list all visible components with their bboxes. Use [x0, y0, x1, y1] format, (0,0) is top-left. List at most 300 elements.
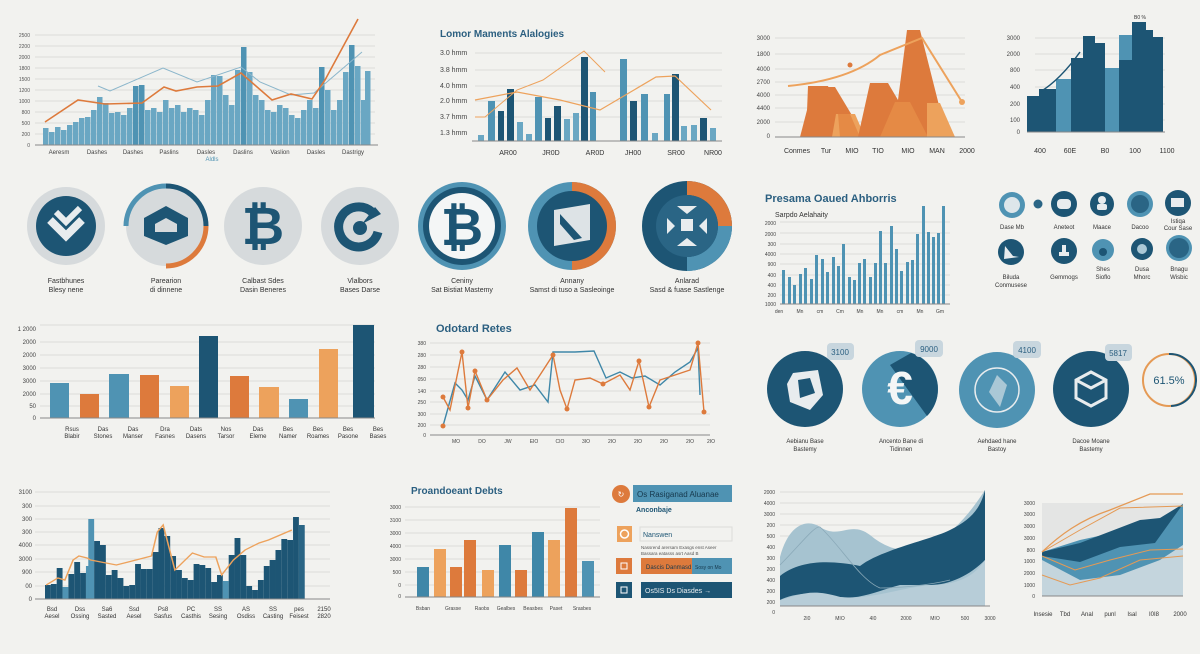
heading: Lomor Maments Alalogies — [440, 29, 565, 40]
item 3 — [616, 582, 632, 598]
panel: Proandoeant debts bar chart: Bsban — [416, 606, 430, 612]
panel: layered area chart: 200 — [767, 523, 775, 529]
panel: small icon grid: Shes — [1096, 267, 1110, 273]
panel: bottom-left bar chart: Ssd — [129, 607, 139, 613]
panel: Proandoeant debts bar chart: 3000 — [390, 505, 401, 511]
panel: bottom-left bar chart: pes — [294, 607, 304, 613]
panel: middle bar chart: Namer — [279, 434, 297, 440]
text block: badge labels: Dacoe Moane — [1072, 439, 1110, 445]
panel: Prestma bar chart: cm — [817, 309, 823, 315]
panel: Odotard rates line chart: DO — [478, 439, 486, 445]
panel: top-left bar chart: 500 — [22, 121, 30, 127]
text block: icon labels: Samst di tuso a Sasleoinge — [530, 287, 615, 294]
panel: middle bar chart: Tarsor — [218, 434, 234, 440]
panel: bottom-left bar chart — [19, 490, 331, 620]
panel: bottom-left bar chart: Sasfus — [154, 614, 172, 620]
panel: bottom-left bar chart: 2150 — [317, 607, 331, 613]
icon: chart dial — [321, 187, 399, 265]
panel: small icon grid: Sioflo — [1095, 275, 1111, 281]
panel: Lomor markets analysis bar chart: 3.7 hmm — [440, 114, 467, 121]
text block: badge labels: Bastemy — [793, 447, 817, 453]
panel: middle bar chart: Roames — [307, 434, 329, 440]
panel: layered area chart: 3000 — [984, 616, 996, 622]
panel: top-left bar chart: Dashes — [123, 150, 143, 156]
panel: Proandoeant debts bar chart: Srasbes — [573, 606, 592, 612]
panel: Prestma bar chart: 2000 — [765, 232, 776, 238]
panel: orange area chart: MIO — [901, 148, 915, 155]
panel: layered area chart: 2I0 — [804, 616, 811, 622]
panel: layered area chart: 200 — [767, 567, 775, 573]
panel: bottom-left bar chart: Feisest — [289, 614, 309, 620]
panel: Proandoeant debts bar chart: Beasbes — [523, 606, 543, 612]
panel: orange area chart: MIO — [845, 148, 859, 155]
panel: Prestma bar chart: 400 — [768, 273, 776, 279]
panel: small icon grid: Dase Mb — [1000, 225, 1025, 231]
panel: Lomor markets analysis bar chart: 3.8 hmm — [440, 67, 467, 74]
panel: Odotard rates line chart: 0 — [423, 433, 426, 439]
panel: layered area chart — [764, 490, 996, 622]
panel: Lomor markets analysis bar chart: JR0D — [542, 150, 560, 157]
panel: middle bar chart: Fasnes — [155, 434, 175, 440]
text block: icon labels: Fastbhunes — [48, 278, 85, 285]
panel: top-left bar chart: Dashes — [87, 150, 107, 156]
panel: small icon grid: Aneteot — [1054, 225, 1075, 231]
panel: Prestma bar chart: 4000 — [765, 252, 776, 258]
panel: dark blue bar chart: 0 — [1017, 130, 1021, 136]
panel: bottom-right line/area chart: I0I8 — [1149, 612, 1160, 618]
panel: Odotard rates line chart: 280 — [418, 365, 426, 371]
panel: list menu: Dascis Danmasd — [646, 565, 691, 571]
panel: layered area chart: 2000 — [764, 490, 775, 496]
panel: bottom-left bar chart: AS — [242, 607, 250, 613]
panel: Proandoeant debts bar chart: Grasse — [445, 606, 461, 612]
panel: Prestma bar chart: 2000 — [765, 221, 776, 227]
panel: Lomor markets analysis bar chart: JH00 — [625, 150, 641, 157]
panel: orange area chart: 0 — [767, 134, 771, 140]
panel: Prestma bar chart: 400 — [768, 283, 776, 289]
panel: middle bar chart: Das — [128, 427, 138, 433]
panel: bottom-right line/area chart: 1000 — [1024, 583, 1035, 589]
panel: bottom-left bar chart: Ps8 — [158, 607, 169, 613]
header bar — [633, 485, 732, 502]
panel: middle bar chart: Stones — [94, 434, 112, 440]
panel: bottom-left bar chart: 300 — [22, 530, 33, 536]
text block: icon labels: Sasd & fuase Sastlenge — [650, 287, 724, 294]
panel: top-left bar chart: 1800 — [19, 66, 30, 72]
icon: globe badge with bubble — [767, 343, 854, 427]
panel: Prestma bar chart: 200 — [768, 293, 776, 299]
panel: orange area chart: 4000 — [757, 93, 771, 99]
panel: bottom-left bar chart: PC — [187, 607, 196, 613]
callout — [1013, 341, 1041, 358]
panel: bottom-right line/area chart: Anal — [1081, 612, 1093, 618]
panel: middle bar chart: 50 — [29, 404, 37, 410]
panel: bottom-left bar chart: 3000 — [19, 557, 33, 563]
panel: middle bar chart: Blabir — [64, 434, 80, 440]
panel: Odotard rates line chart: MO — [452, 439, 460, 445]
panel: Prestma bar chart — [765, 193, 950, 315]
panel: bottom-right line/area chart: 3000 — [1024, 524, 1035, 530]
panel: layered area chart: 3000 — [764, 512, 775, 518]
text block: badge labels: Aehdaed hane — [977, 439, 1017, 445]
panel: Odotard rates line chart: 2IO — [707, 439, 715, 445]
panel: middle bar chart: Das — [98, 427, 108, 433]
icon: box badge with bubble — [1053, 344, 1132, 427]
panel: bottom-left bar chart: Sesing — [209, 614, 227, 620]
text block: badge labels: Aebianu Base — [786, 439, 824, 445]
panel: Prestma bar chart: Cm — [836, 309, 844, 315]
panel: top-left bar chart: Dasles — [307, 150, 325, 156]
icon: bitcoin grey: ₿ — [242, 198, 284, 256]
panel: bottom-right line/area chart: 1000 — [1024, 559, 1035, 565]
panel: top-left bar chart: 0 — [27, 143, 30, 149]
panel: Lomor markets analysis bar chart: 4.0 hmm — [440, 83, 467, 90]
panel: Proandoeant debts bar chart: Raobs — [475, 606, 490, 612]
panel: layered area chart: 500 — [961, 616, 969, 622]
panel: small icon grid: Dacoo — [1131, 225, 1149, 231]
panel: top-left bar chart: Dastrigy — [342, 150, 364, 156]
panel: Proandoeant debts bar chart: 3100 — [390, 518, 401, 524]
panel: bottom-right line/area chart: 800 — [1027, 548, 1035, 554]
panel: bottom-left bar chart: 300 — [22, 504, 33, 510]
panel: Prestma bar chart: 900 — [768, 262, 776, 268]
panel: top-left bar chart: Paslins — [159, 150, 179, 156]
panel: middle bar chart: Dra — [160, 427, 170, 433]
panel: bottom-left bar chart: Aesel — [126, 614, 142, 620]
panel: list menu: Nassrend arersam Exasgs enst Aseer — [641, 545, 717, 550]
panel: middle bar chart: Bes — [283, 427, 293, 433]
panel: orange area chart: 2000 — [959, 148, 975, 155]
panel: Lomor markets analysis bar chart: NR00 — [704, 150, 722, 157]
panel: Lomor markets analysis bar chart: AR0D — [586, 150, 604, 157]
panel: layered area chart: MIO — [930, 616, 940, 622]
panel: top-left bar chart: 2500 — [19, 33, 30, 39]
panel: Odotard rates line chart: EIO — [530, 439, 538, 445]
panel: Odotard rates line chart — [418, 323, 715, 445]
panel: bottom-left bar chart: Aesel — [44, 614, 60, 620]
panel: Proandoeant debts bar chart: 0 — [398, 583, 401, 589]
panel: Prestma bar chart: Mn — [917, 309, 924, 315]
panel: middle bar chart: 3000 — [23, 366, 37, 372]
panel: bottom-left bar chart: SS — [269, 607, 277, 613]
panel: Prestma bar chart: Mn — [877, 309, 884, 315]
text block: icon labels: Calbast Sdes — [242, 278, 284, 285]
panel: middle bar chart: Dasens — [186, 434, 206, 440]
panel: bottom-left bar chart: Sa6 — [102, 607, 113, 613]
panel: Proandoeant debts bar chart: 500 — [393, 570, 401, 576]
panel: Odotard rates line chart: 2IO — [634, 439, 642, 445]
panel: Odotard rates line chart: 140 — [418, 389, 426, 395]
panel: bottom-left bar chart: 300 — [22, 517, 33, 523]
icon: euro badge with bubble — [862, 340, 943, 427]
panel: dark blue bar chart: 3000 — [1007, 36, 1021, 42]
panel: top-left bar chart: 2200 — [19, 44, 30, 50]
panel: dark blue bar chart: 800 — [1010, 68, 1021, 74]
callout — [827, 343, 854, 360]
panel: middle bar chart: Manser — [123, 434, 143, 440]
panel: bottom-right line/area chart: Insesie — [1033, 612, 1053, 618]
panel: middle bar chart: Bases — [370, 434, 386, 440]
icon: bitcoin ring — [418, 182, 506, 270]
panel: bottom-right line/area chart: 0 — [1032, 594, 1035, 600]
panel: Prestma bar chart: Mn — [797, 309, 804, 315]
panel: layered area chart: 0 — [772, 610, 775, 616]
icon: percent ring — [1143, 354, 1196, 406]
panel: orange area chart: 3000 — [757, 36, 771, 42]
panel: middle bar chart: Dats — [190, 427, 202, 433]
panel: list menu — [612, 485, 732, 598]
panel: top-left bar chart: Aeresm — [49, 150, 69, 156]
panel: middle bar chart: 1 2000 — [18, 327, 37, 333]
panel: Prestma bar chart: 1000 — [765, 302, 776, 308]
panel: middle bar chart: Eleme — [249, 434, 267, 440]
panel: middle bar chart: 0 — [33, 416, 37, 422]
panel: dark blue bar chart: 400 — [1010, 85, 1021, 91]
panel: top-left bar chart: 2000 — [19, 55, 30, 61]
panel: small icon grid: Bnagu — [1170, 267, 1188, 273]
panel: list menu: Nanswen — [643, 532, 672, 539]
panel: dark blue bar chart: 2000 — [1007, 52, 1021, 58]
panel: Lomor markets analysis bar chart: 2.0 hmm — [440, 98, 467, 105]
panel: dark blue bar chart: B0 % — [1134, 15, 1147, 21]
panel: dark blue bar chart: 60E — [1064, 148, 1077, 155]
panel: middle bar chart — [18, 325, 386, 440]
panel: dark blue bar chart: 1100 — [1159, 148, 1175, 155]
panel: Prestma bar chart: Gm — [936, 309, 944, 315]
text block: icon labels: Vlalbors — [347, 278, 373, 285]
panel: middle bar chart: Rsus — [65, 427, 79, 433]
text block: icon labels: Ceniny — [451, 278, 473, 285]
panel: layered area chart: 4000 — [764, 501, 775, 507]
panel: list menu: Os5IS Ds Diasdes → — [645, 588, 711, 595]
panel: middle bar chart: 3000 — [23, 379, 37, 385]
panel: Lomor markets analysis bar chart: 3.0 hmm — [440, 50, 467, 57]
heading: Proandoeant Debts — [411, 486, 503, 497]
panel: middle bar chart: Bes — [343, 427, 353, 433]
panel: top-left bar chart: Aldls — [205, 157, 219, 163]
panel: bottom-right line/area chart: 3000 — [1024, 512, 1035, 518]
panel: orange area chart: 1800 — [757, 52, 771, 58]
panel: Prestma bar chart: den — [775, 309, 783, 315]
panel: bottom-left bar chart: 3100 — [19, 490, 33, 496]
icon: diamond badge with bubble: 4100 — [1018, 346, 1036, 355]
panel: Prestma bar chart: cm — [897, 309, 903, 315]
panel: Lomor markets analysis bar chart: AR00 — [499, 150, 517, 157]
icon: orange circle — [612, 485, 630, 503]
panel: bottom-right line/area chart: 2000 — [1024, 571, 1035, 577]
item 1 — [617, 526, 632, 542]
panel: bottom-left bar chart: 00 — [25, 584, 33, 590]
callout — [915, 340, 943, 357]
text block: icon labels: Anlarad — [675, 278, 699, 285]
icon: percent ring: 61.5% — [1153, 375, 1185, 387]
panel: bottom-left bar chart: Sasted — [98, 614, 116, 620]
icon: split square badge — [528, 182, 616, 270]
panel: middle bar chart: Pasone — [338, 434, 359, 440]
panel: layered area chart: 200 — [767, 600, 775, 606]
panel: top-left bar chart: 1000 — [19, 99, 30, 105]
text block: badge labels: Bastemy — [1079, 447, 1103, 453]
panel: bottom-left bar chart: Dss — [75, 607, 85, 613]
text block: icon labels: Annany — [560, 278, 584, 285]
panel: dark blue bar chart: 100 — [1129, 148, 1141, 155]
panel: dark blue bar chart: 200 — [1010, 102, 1021, 108]
panel: list menu: Sosy on Mo — [695, 565, 722, 571]
panel: bottom-left bar chart: 2820 — [317, 614, 331, 620]
text block: badge labels: Ancento Bane di — [879, 439, 923, 445]
panel: small icon grid: Gemmogs — [1050, 275, 1078, 281]
panel: Lomor markets analysis bar chart: 1.3 hmm — [440, 130, 467, 137]
icon: bitcoin ring: ₿ — [441, 199, 483, 257]
panel: dark blue bar chart: 100 — [1010, 118, 1021, 124]
icon: globe badge with bubble: 3100 — [831, 348, 849, 357]
panel: bottom-left bar chart: Bsd — [47, 607, 57, 613]
panel: Prestma bar chart: 300 — [768, 242, 776, 248]
panel: top-left bar chart — [19, 19, 378, 163]
panel: top-left bar chart: Vaslion — [270, 150, 290, 156]
panel: Prestma bar chart: Mn — [857, 309, 864, 315]
text block: badge labels: Tidinnen — [890, 447, 912, 453]
panel: middle bar chart: Das — [253, 427, 263, 433]
panel: bottom-right line/area chart: 3000 — [1024, 536, 1035, 542]
panel: top-left bar chart: 800 — [22, 110, 30, 116]
panel: top-left bar chart: Dasles — [197, 150, 215, 156]
panel: list menu: Bassara eatasss asrt Aasd B — [641, 551, 699, 556]
icon: diamond badge with bubble — [959, 341, 1041, 428]
panel: bottom-right line/area chart — [1024, 494, 1187, 618]
text block: icon labels: Sat Bistiat Mastemy — [431, 287, 493, 294]
panel: small icon grid: Istiqa — [1171, 219, 1186, 225]
panel: list menu: Anconbaje — [636, 507, 672, 514]
panel: list menu: Os Rasiganad Aluanae — [637, 490, 719, 499]
panel: bottom-right line/area chart: punl — [1104, 612, 1116, 618]
panel: bottom-left bar chart: SS — [214, 607, 222, 613]
icon: exchange badge — [642, 181, 732, 271]
panel: layered area chart: 500 — [767, 534, 775, 540]
panel: bottom-left bar chart: Casting — [263, 614, 283, 620]
heading: Presama Oaued Ahborris — [765, 193, 897, 205]
panel: orange area chart: 2700 — [757, 80, 771, 86]
panel: orange area chart: MAN — [929, 148, 945, 155]
panel: bottom-left bar chart: Casthis — [181, 614, 201, 620]
panel: small icon grid: Dusa — [1135, 267, 1150, 273]
panel: Lomor markets analysis bar chart: SR00 — [667, 150, 685, 157]
heading: Odotard Retes — [436, 323, 512, 335]
panel: layered area chart: 400 — [767, 578, 775, 584]
panel: small icon grid: Mhorc — [1134, 275, 1150, 281]
panel: orange area chart: TIO — [872, 148, 884, 155]
icon: box badge with bubble: 5817 — [1109, 349, 1127, 358]
panel: Odotard rates line chart: JW — [504, 439, 512, 445]
panel: Prestma bar chart: Sarpdo Aelahaity — [775, 212, 828, 219]
panel: layered area chart: MIO — [835, 616, 845, 622]
panel: Odotard rates line chart: 050 — [418, 377, 426, 383]
text block: badge labels: Bastoy — [988, 447, 1006, 453]
panel: bottom-left bar chart: 0 — [29, 597, 33, 603]
panel: Odotard rates line chart: 380 — [418, 341, 426, 347]
panel: orange area chart: 4400 — [757, 106, 771, 112]
panel: orange area chart: 4000 — [757, 67, 771, 73]
panel: orange area chart — [757, 30, 975, 155]
panel: top-left bar chart: 200 — [22, 132, 30, 138]
panel: Proandoeant debts bar chart: Gealbes — [497, 606, 516, 612]
panel: orange area chart: Tur — [821, 148, 832, 155]
panel: top-left bar chart: 1500 — [19, 77, 30, 83]
icon: chevron badge — [27, 187, 105, 265]
panel: layered area chart: 300 — [767, 556, 775, 562]
text block: icon labels: Blesy nene — [49, 287, 83, 294]
panel: bottom-right line/area chart: 2000 — [1173, 612, 1187, 618]
text block: badge labels — [786, 439, 1110, 453]
panel: small icon grid: Wisbic — [1170, 275, 1188, 281]
panel: small icon grid: Conmusese — [995, 283, 1028, 289]
panel: Odotard rates line chart: 3IO — [582, 439, 590, 445]
text block: icon labels: Parearion — [151, 278, 181, 285]
panel: small icon grid: Biluda — [1003, 275, 1020, 281]
panel: small icon grid: Maace — [1093, 225, 1112, 231]
panel: bottom-left bar chart: Osdiss — [237, 614, 255, 620]
panel: small icon grid: Cour Sase — [1164, 226, 1193, 232]
panel: middle bar chart: Bes — [313, 427, 323, 433]
icon: euro badge with bubble: 9000 — [920, 345, 938, 354]
panel: dark blue bar chart: 400 — [1034, 148, 1046, 155]
panel: Proandoeant debts bar chart — [390, 486, 600, 612]
panel: bottom-left bar chart: 4000 — [19, 543, 33, 549]
item 2 — [616, 558, 632, 574]
panel: list menu: ↻ — [618, 490, 624, 499]
panel: layered area chart: 4I0 — [870, 616, 877, 622]
panel: top-left bar chart: 1200 — [19, 88, 30, 94]
panel: Odotard rates line chart: 280 — [418, 353, 426, 359]
panel: Proandoeant debts bar chart: 0 — [398, 594, 401, 600]
panel: Lomor markets analysis bar chart — [440, 29, 722, 157]
panel: orange area chart: 2000 — [757, 120, 771, 126]
panel: bottom-right line/area chart: 3000 — [1024, 501, 1035, 507]
panel: small icon grid — [995, 190, 1193, 289]
panel: middle bar chart: 2000 — [23, 353, 37, 359]
panel: Odotard rates line chart: 300 — [418, 412, 426, 418]
panel: dark blue bar chart — [1007, 15, 1175, 155]
panel: middle bar chart: Bes — [373, 427, 383, 433]
text block: icon labels: Bases Darse — [340, 287, 380, 294]
panel: Proandoeant debts bar chart: Paset — [550, 606, 563, 612]
panel: middle bar chart: 2000 — [23, 340, 37, 346]
panel: Odotard rates line chart: 2IO — [608, 439, 616, 445]
icon: euro badge with bubble: € — [887, 362, 913, 414]
panel: bottom-left bar chart: Ossing — [71, 614, 89, 620]
panel: Odotard rates line chart: 2IO — [686, 439, 694, 445]
panel: Odotard rates line chart: 2IO — [660, 439, 668, 445]
panel: middle bar chart: 2000 — [23, 392, 37, 398]
panel: layered area chart: 400 — [767, 545, 775, 551]
panel: top-left bar chart: Daslins — [233, 150, 253, 156]
panel: bottom-left bar chart: 900 — [22, 570, 33, 576]
panel: layered area chart: 200 — [767, 589, 775, 595]
panel: bottom-right line/area chart: Tbd — [1060, 612, 1070, 618]
panel: Proandoeant debts bar chart: 4000 — [390, 544, 401, 550]
text block: icon labels: Dasin Beneres — [240, 287, 286, 294]
panel: Odotard rates line chart: 200 — [418, 423, 426, 429]
panel: orange area chart: Conmes — [784, 148, 811, 155]
panel: dark blue bar chart: B0 — [1101, 148, 1109, 155]
panel: Proandoeant debts bar chart: 3000 — [390, 531, 401, 537]
text block: icon labels: di dinnene — [150, 287, 182, 294]
icon: hexagon ring badge — [126, 186, 206, 266]
callout — [1105, 344, 1132, 361]
panel: layered area chart: 2000 — [900, 616, 912, 622]
panel: Odotard rates line chart: CIO — [556, 439, 565, 445]
icon: bitcoin grey — [224, 187, 302, 265]
